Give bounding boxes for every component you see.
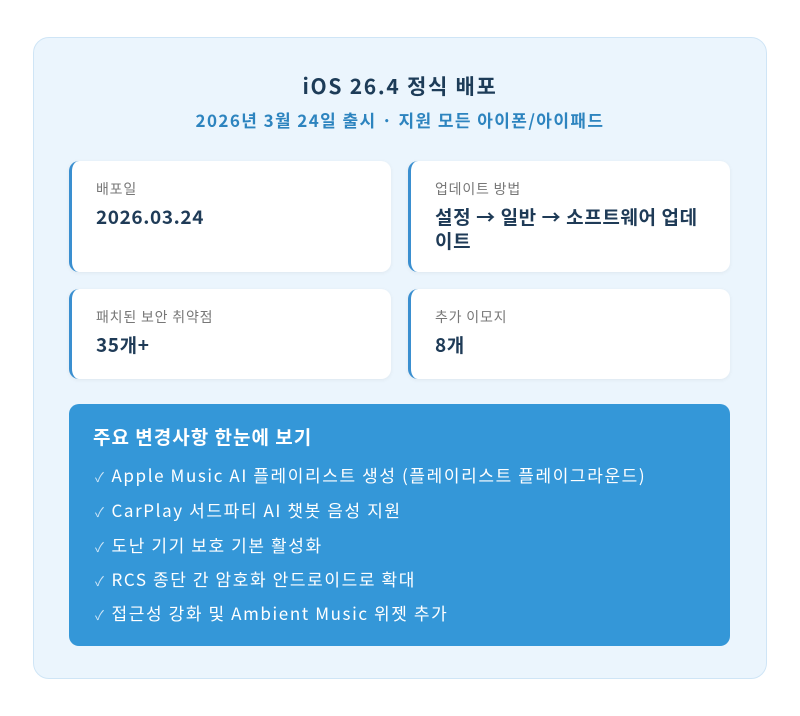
card: emoji: 8개 bbox=[435, 331, 465, 358]
card: release date bbox=[69, 161, 391, 272]
card: release date: 배포일 bbox=[96, 179, 137, 199]
panel heading: 주요 변경사항 한눈에 보기 bbox=[93, 423, 312, 450]
card: update method: 이트 bbox=[435, 227, 471, 254]
card: emoji: 추가 이모지 bbox=[435, 307, 507, 327]
panel: key changes bbox=[69, 404, 730, 646]
card: patched vulnerabilities bbox=[69, 289, 391, 379]
card: release date: 2026.03.24 bbox=[96, 203, 204, 230]
item 1: ✓ Apple Music AI 플레이리스트 생성 (플레이리스트 플레이그라운드) bbox=[95, 462, 646, 487]
item 5: ✓ 접근성 강화 및 Ambient Music 위젯 추가 bbox=[95, 600, 448, 625]
item 4: ✓ RCS 종단 간 암호화 안드로이드로 확대 bbox=[95, 566, 416, 591]
title: iOS 26.4 정식 배포 bbox=[302, 71, 498, 101]
card: update method: 설정 → 일반 → 소프트웨어 업데 bbox=[435, 203, 698, 230]
card: update method: 업데이트 방법 bbox=[435, 179, 521, 199]
item 2: ✓ CarPlay 서드파티 AI 챗봇 음성 지원 bbox=[95, 497, 402, 522]
card: update method bbox=[408, 161, 730, 272]
card: emoji bbox=[408, 289, 730, 379]
card: patched vulnerabilities: 패치된 보안 취약점 bbox=[96, 307, 213, 327]
card: patched vulnerabilities: 35개+ bbox=[96, 331, 150, 358]
subtitle: 2026년 3월 24일 출시 · 지원 모든 아이폰/아이패드 bbox=[196, 107, 604, 132]
item 3: ✓ 도난 기기 보호 기본 활성화 bbox=[95, 532, 323, 557]
